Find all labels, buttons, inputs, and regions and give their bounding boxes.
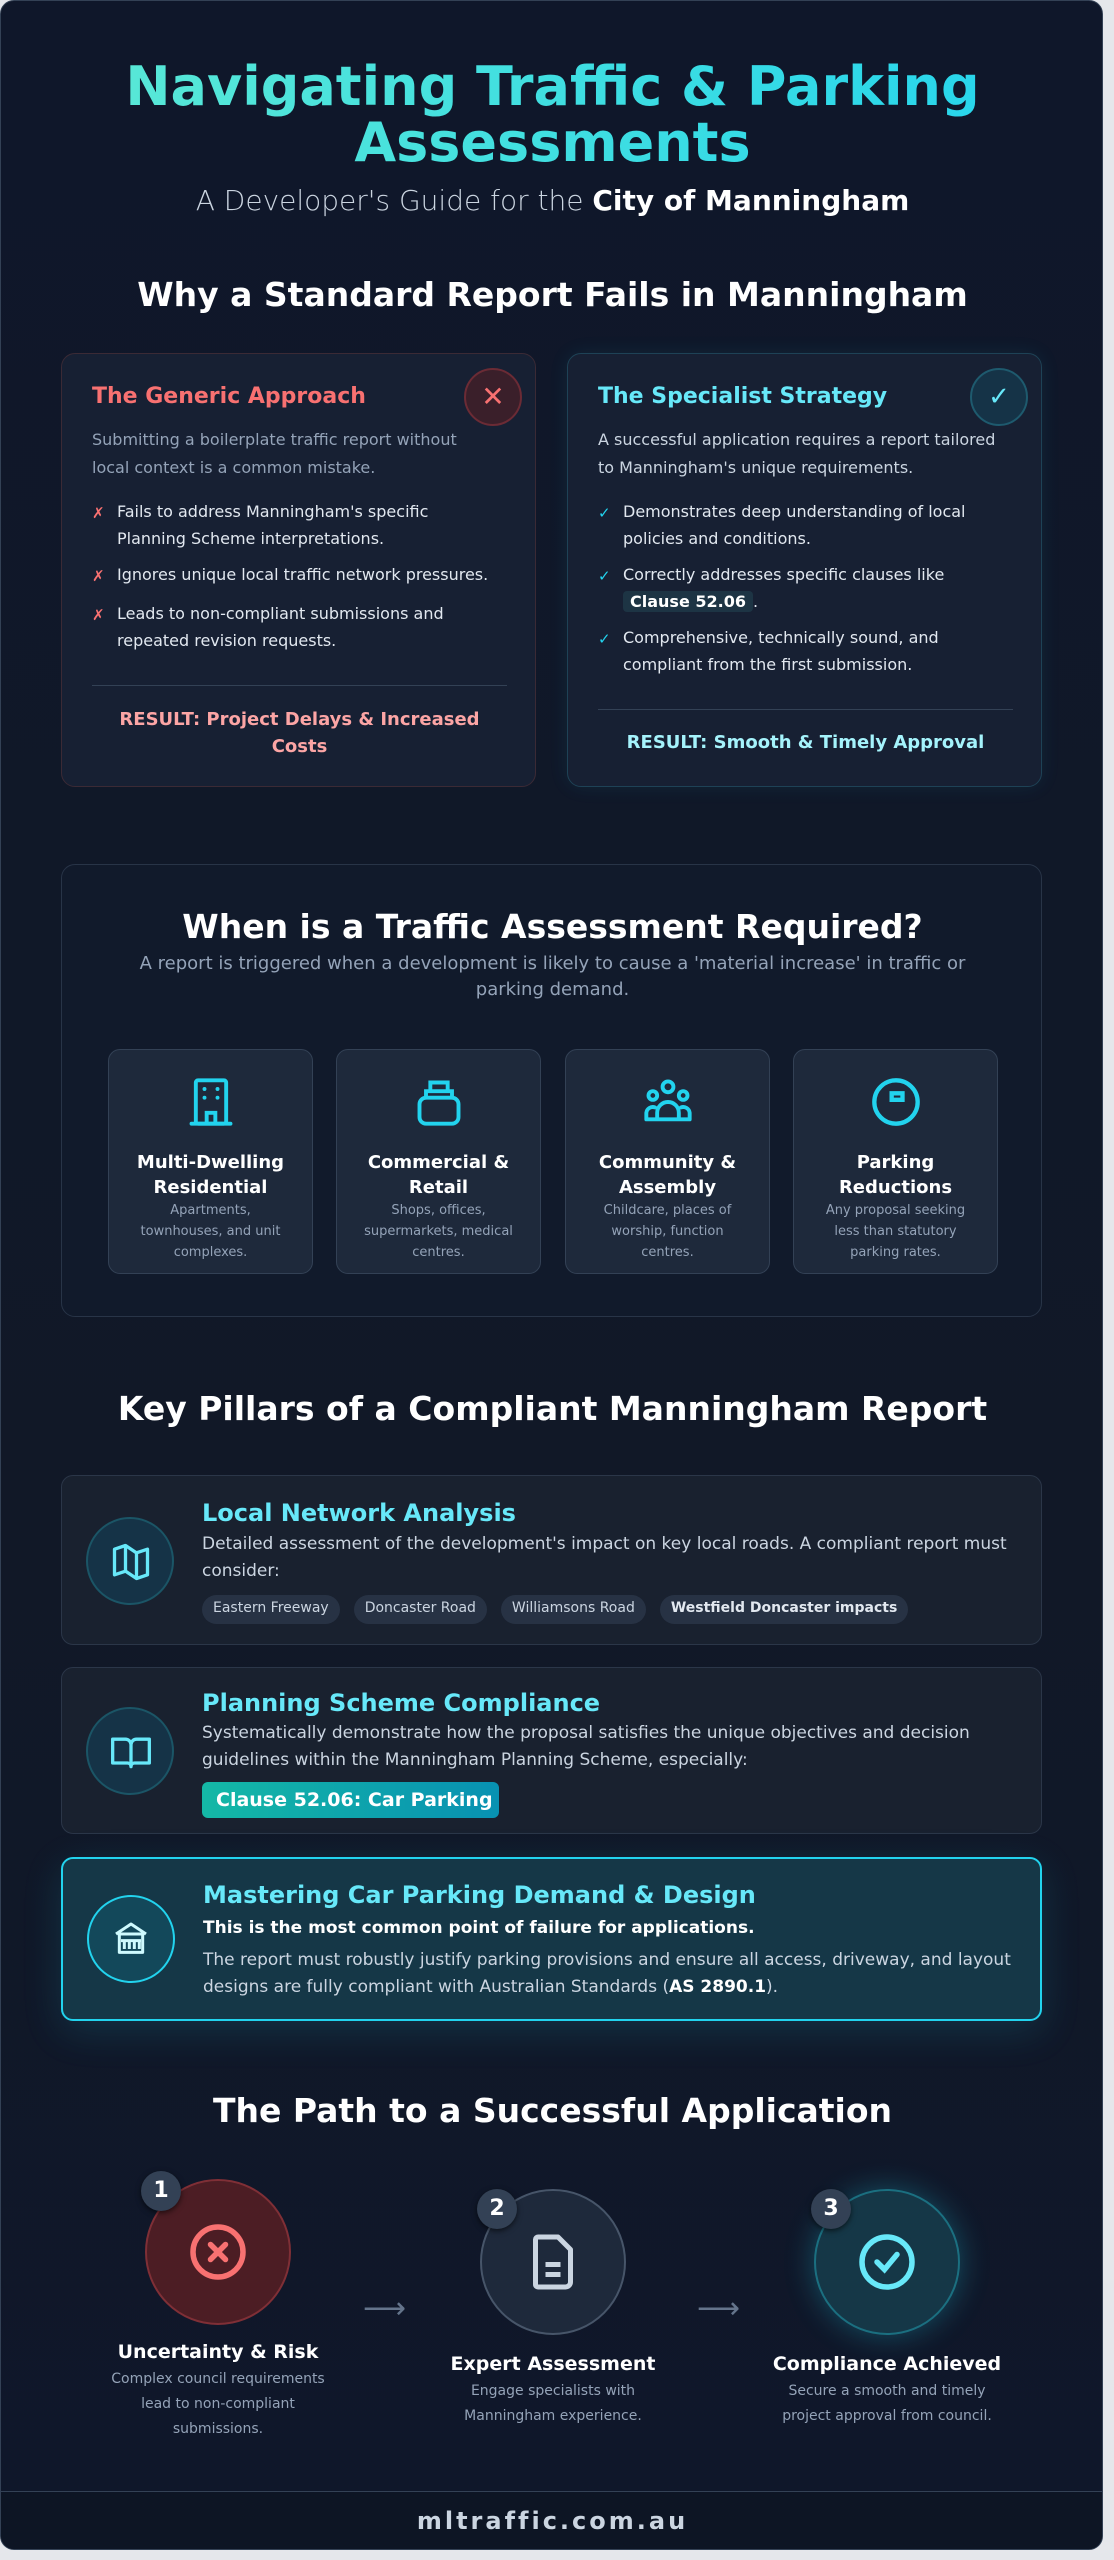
icon: shop <box>418 1080 460 1126</box>
result: approval: RESULT: Smooth & Timely Approval <box>627 732 984 753</box>
list: specialist benefits <box>598 502 965 674</box>
badge 3: 3 <box>823 2196 839 2221</box>
list: specialist benefits: Demonstrates deep understanding of local policies and conditions. <box>623 502 965 548</box>
title: Navigating Traffic & Parking <box>125 55 980 118</box>
panel: generic approach: ✗ <box>92 567 105 585</box>
icon: red circle cross <box>145 2179 291 2325</box>
card: commercial <box>336 1049 541 1274</box>
title <box>1 59 1104 171</box>
icon: check circle <box>970 368 1028 426</box>
tags: roads <box>202 1595 908 1624</box>
arrow 2: ⟶ <box>697 2291 740 2326</box>
heading: Mastering Car Parking Demand & Design <box>203 1881 756 1909</box>
pillar: planning scheme compliance <box>61 1667 1042 1834</box>
card: community: Childcare, places of worship, function centres. <box>604 1203 731 1260</box>
result: delays: RESULT: Project Delays & Increased Costs <box>119 709 480 757</box>
icon: check circle <box>814 2189 960 2335</box>
card: residential: Apartments, townhouses, and unit complexes. <box>141 1203 280 1260</box>
text: generic description: Submitting a boilerplate traffic report without local context is a common mistake. <box>92 430 457 477</box>
heading: generic approach: The Generic Approach <box>92 384 366 409</box>
card: commercial: Shops, offices, supermarkets, medical centres. <box>364 1203 513 1260</box>
card: residential: Multi-Dwelling Residential <box>137 1152 284 1198</box>
step 2: Expert Assessment <box>451 2353 655 2375</box>
card: commercial: Commercial & Retail <box>368 1152 509 1198</box>
panel: specialist strategy <box>567 353 1042 787</box>
panel: generic approach <box>61 353 536 787</box>
card: residential <box>108 1049 313 1274</box>
card: parking reductions: Parking Reductions <box>839 1152 952 1198</box>
step 1: Complex council requirements lead to non-compliant submissions. <box>111 2371 325 2437</box>
step 1: Uncertainty & Risk <box>118 2341 318 2363</box>
badge: clause 52.06 <box>202 1782 499 1818</box>
pillar: local network analysis <box>61 1475 1042 1645</box>
pillar: car parking <box>61 1857 1042 2021</box>
tags: roads: Westfield Doncaster impacts <box>671 1600 897 1616</box>
heading: specialist strategy: The Specialist Strategy <box>598 384 887 409</box>
badge 1 <box>141 2171 181 2211</box>
heading: path to success: The Path to a Successful Application <box>213 2091 892 2130</box>
card: parking reductions: Any proposal seeking less than statutory parking rates. <box>826 1203 965 1260</box>
list: generic failures: Leads to non-compliant submissions and repeated revision requests. <box>117 604 444 650</box>
title: Assessments <box>354 111 751 174</box>
card: community <box>565 1049 770 1274</box>
arrow 1: ⟶ <box>363 2291 406 2326</box>
step 3: Secure a smooth and timely project approval from council. <box>782 2383 992 2424</box>
list: generic failures: Ignores unique local traffic network pressures. <box>117 565 488 584</box>
text: Detailed assessment of the development's impact on key local roads. A compliant report must consider: <box>202 1534 1007 1581</box>
icon: book <box>86 1707 174 1795</box>
badge 2: 2 <box>489 2196 505 2221</box>
text: trigger description: A report is triggered when a development is likely to cause a 'material increase' in traffic or parking demand. <box>140 953 965 1000</box>
icon: building <box>190 1078 232 1126</box>
panel: specialist strategy: ✓ <box>598 567 611 585</box>
heading: why standard report fails: Why a Standard Report Fails in Manningham <box>137 275 968 314</box>
panel: specialist strategy: ✓ <box>598 630 611 648</box>
badge 3 <box>811 2189 851 2229</box>
footer: mltraffic.com.au <box>417 2507 688 2535</box>
icon: cross circle <box>464 368 522 426</box>
list: generic failures <box>92 502 488 650</box>
badge: clause 52.06: Clause 52.06: Car Parking <box>216 1789 493 1811</box>
text: Systematically demonstrate how the proposal satisfies the unique objectives and decision guidelines within the Manningham Planning Scheme, especially: <box>202 1723 970 1770</box>
icon: map <box>86 1517 174 1605</box>
panel: generic approach: ✗ <box>92 606 105 624</box>
list: specialist benefits: Correctly addresses specific clauses like Clause 52.06 . <box>623 565 944 611</box>
icon: check circle: ✓ <box>988 382 1010 412</box>
text: bold line: This is the most common point of failure for applications. <box>203 1918 755 1938</box>
icon: cross circle: ✕ <box>481 380 505 413</box>
panel: when required <box>61 864 1042 1317</box>
panel: specialist strategy: ✓ <box>598 504 611 522</box>
step 3: Compliance Achieved <box>773 2353 1001 2375</box>
heading: key pillars: Key Pillars of a Compliant Manningham Report <box>118 1389 987 1428</box>
heading: Planning Scheme Compliance <box>202 1689 600 1717</box>
list: generic failures: Fails to address Manningham's specific Planning Scheme interpretations. <box>117 502 428 548</box>
step 2 <box>451 2189 656 2424</box>
heading: when required: When is a Traffic Assessment Required? <box>182 907 923 946</box>
step 1 <box>111 2171 325 2437</box>
tags: roads: Eastern Freeway <box>213 1600 329 1616</box>
text: The report must robustly justify parking provisions and ensure all access, driveway, and layout designs are fully compliant with Australian Standards (AS 2890.1). <box>203 1950 1011 1997</box>
step 2: Engage specialists with Manningham experience. <box>464 2383 642 2424</box>
footer <box>1 2492 1104 2551</box>
subtitle: A Developer's Guide for the City of Manningham <box>196 184 909 217</box>
tags: roads: Doncaster Road <box>365 1600 476 1616</box>
card: parking reductions <box>793 1049 998 1274</box>
badge 2 <box>477 2189 517 2229</box>
icon: parking <box>872 1078 920 1126</box>
heading: Local Network Analysis <box>202 1499 516 1527</box>
step 3 <box>773 2176 1001 2424</box>
icon: people <box>644 1080 692 1122</box>
list: specialist benefits: Comprehensive, technically sound, and compliant from the first submission. <box>623 628 939 674</box>
icon: document circle <box>480 2189 626 2335</box>
icon: parking garage <box>87 1895 175 1983</box>
tags: roads: Williamsons Road <box>512 1600 635 1616</box>
text: specialist description: A successful application requires a report tailored to Manningham's unique requirements. <box>598 430 995 477</box>
card: community: Community & Assembly <box>599 1152 736 1198</box>
panel: generic approach: ✗ <box>92 504 105 522</box>
badge 1: 1 <box>153 2178 169 2203</box>
